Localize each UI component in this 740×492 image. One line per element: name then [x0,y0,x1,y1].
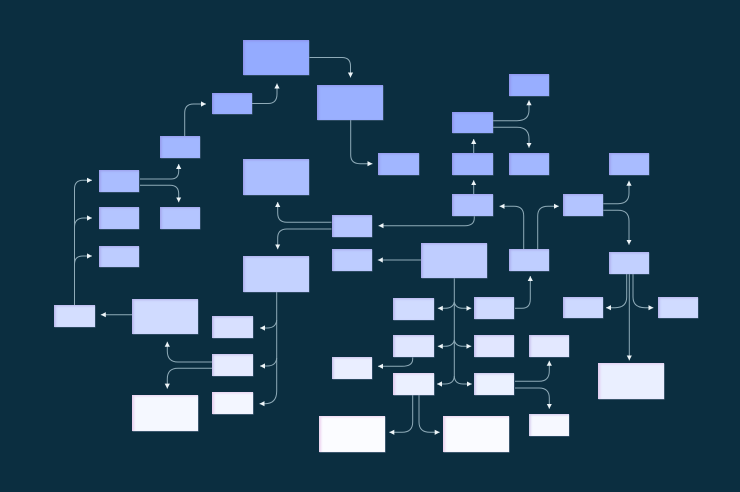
box: far right small [609,252,649,274]
connector: upper right box branching down [493,127,529,148]
connector: far right box branching down [603,210,629,245]
connector: upper right box branching up [493,100,529,121]
box: small left of centre [332,357,372,379]
box: left column middle [99,207,139,229]
box: left column bottom [99,246,139,267]
box: far right large [598,363,664,399]
box: centre small top [332,215,372,237]
box: second large [317,85,383,120]
connector: small box up to large box [167,342,212,362]
box: left second column [160,207,200,229]
box: left step [160,136,200,158]
box: centre large [243,159,309,195]
connector: left trunk with three branches [260,292,277,404]
box: right row 1 [509,153,549,175]
box: bottom-left small [54,305,95,327]
box: top large [243,40,309,75]
box: central right row 1 [474,297,514,319]
connector: central large box to left [378,259,421,261]
box: far right row 2 [563,194,603,216]
box: far right row right [658,297,698,318]
connector: bottom-left box fan-out to three boxes [74,180,92,305]
box: centre-right row 2 [452,194,493,216]
box: right small row 1 [378,153,419,175]
connector: top box to second large box [310,58,350,78]
connector: small box down to large box [167,368,212,389]
box: upper right small [452,112,493,133]
box: bottom centre-left large [319,416,385,452]
connector: large box left to bottom-left box [101,314,132,316]
box: left centre large [243,256,309,292]
connector: bottom box to lower right large box [419,395,440,432]
connector: right box up-left [500,206,524,249]
box: central left row 2 [393,335,434,357]
box: far right row left [563,297,603,318]
box: central right row 3 [474,373,514,395]
box: large left of trunk [132,299,198,334]
box: top right small [509,74,549,96]
box: left column top [99,170,139,192]
box: centre small bottom [332,249,372,271]
box: bottom centre-right large [443,416,509,452]
box: central right row 2 [474,335,514,357]
connector: long arrow left to centre box [378,216,474,226]
connector: right-hand box up to small box [515,276,530,308]
connector: step box to upper small box [185,104,206,136]
box: upper left step [212,93,252,114]
box: central large [421,243,487,278]
connector: bottom box to lower left large box [389,395,413,432]
connector: left box branching up [140,164,179,179]
connector: central trunk with left and right branches [437,278,472,384]
connector: left box branching down [140,185,179,202]
box: right centre small [509,249,549,271]
box: right row 2 [529,335,569,357]
connector: right box up-right [538,206,559,249]
box: bottom right small [529,414,569,436]
connector: lower right box branching down [515,388,549,409]
connector: centre box up to large box [278,202,332,222]
connector: small box to lower left box [378,358,413,366]
connector: small box up to top box [252,84,277,104]
box: trunk left row 1 [212,316,253,338]
connector: vertical step up [473,139,475,153]
box: central left row 3 [393,373,434,395]
connector: vertical step up lower [473,180,475,194]
connector: lower right box branching up [515,361,549,381]
connector: far right box branching up [603,181,629,204]
box: centre-right row 1 [452,153,493,175]
box: trunk left row 2 [212,354,253,376]
connector: far right triple branch [606,274,653,360]
box: bottom-left large [132,395,198,431]
box: trunk left row 3 [212,392,253,414]
connector: centre box down to large box [278,229,332,249]
connector: second large box to right small box [351,120,372,164]
box: central left row 1 [393,298,434,320]
box: far right row 1 [609,153,649,175]
